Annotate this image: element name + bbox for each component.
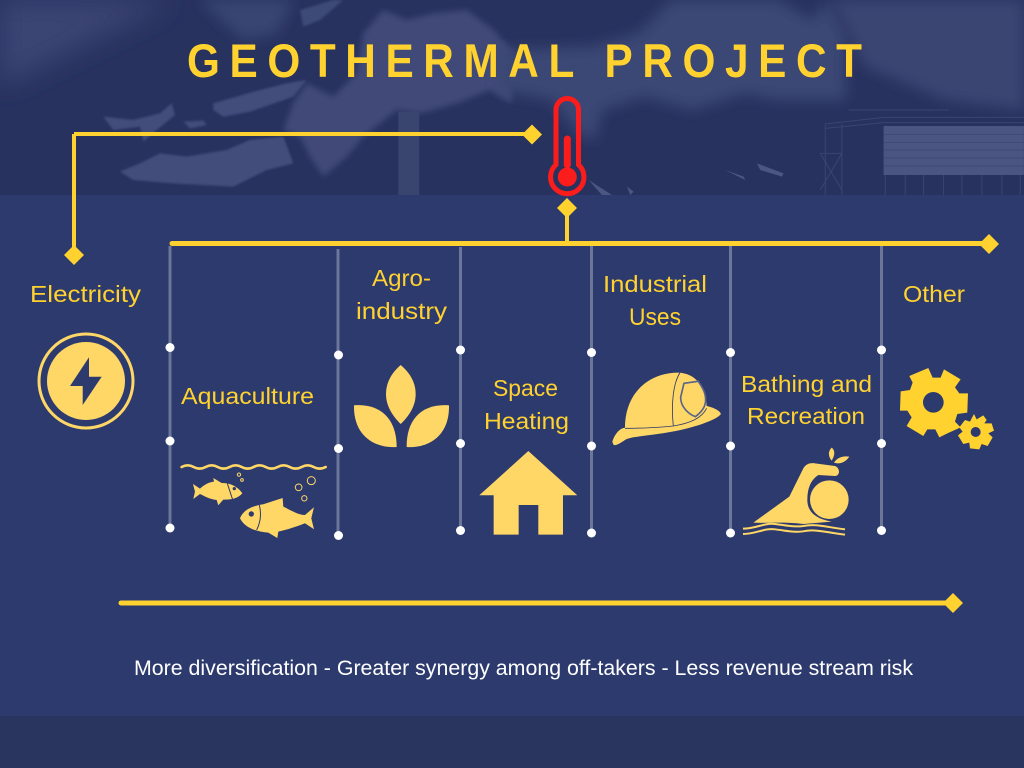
label: Space Heating: Heating: [484, 408, 569, 434]
label: Aquaculture: Aquaculture: [181, 383, 314, 409]
caption: More diversification - Greater synergy among off-takers - Less revenue stream risk: [134, 657, 913, 680]
icon: hard hat: [612, 373, 721, 445]
icon: thermometer: [551, 99, 584, 194]
connector to electricity: [64, 124, 542, 265]
icon: swimmer: [743, 448, 849, 535]
label: Agro-industry: Agro-: [372, 265, 431, 291]
label: Agro-industry: [356, 265, 448, 324]
plant chimney: [398, 112, 419, 195]
icon: house: [479, 451, 577, 535]
header photo of geothermal plant: [0, 0, 1024, 195]
icon: fish in water: [182, 465, 326, 538]
icon: leaves: [354, 365, 449, 447]
label: Industrial Uses: Industrial: [603, 271, 707, 297]
column dividers: [166, 246, 886, 540]
label: Industrial Uses: Uses: [629, 304, 681, 331]
title: GEOTHERMAL PROJECT: [187, 36, 862, 88]
icon: gears: [900, 368, 994, 449]
label: Bathing and Recreation: Bathing and: [741, 371, 872, 397]
diversification arrow: [121, 593, 963, 613]
label: Agro-industry: industry: [356, 298, 448, 324]
label: Space Heating: [484, 375, 569, 434]
plant railing and scaffolding: [820, 110, 1024, 195]
distribution bar with arrowhead: [172, 198, 999, 254]
cooling tower: [884, 126, 1024, 175]
icon: lightning bolt: [39, 334, 133, 428]
label: Electricity: Electricity: [30, 281, 142, 307]
label: Space Heating: Space: [493, 375, 558, 401]
bottom band: [0, 716, 1024, 768]
label: Other: Other: [903, 281, 965, 307]
label: Bathing and Recreation: [741, 371, 872, 429]
label: Industrial Uses: [603, 271, 707, 331]
label: Bathing and Recreation: Recreation: [747, 403, 865, 429]
